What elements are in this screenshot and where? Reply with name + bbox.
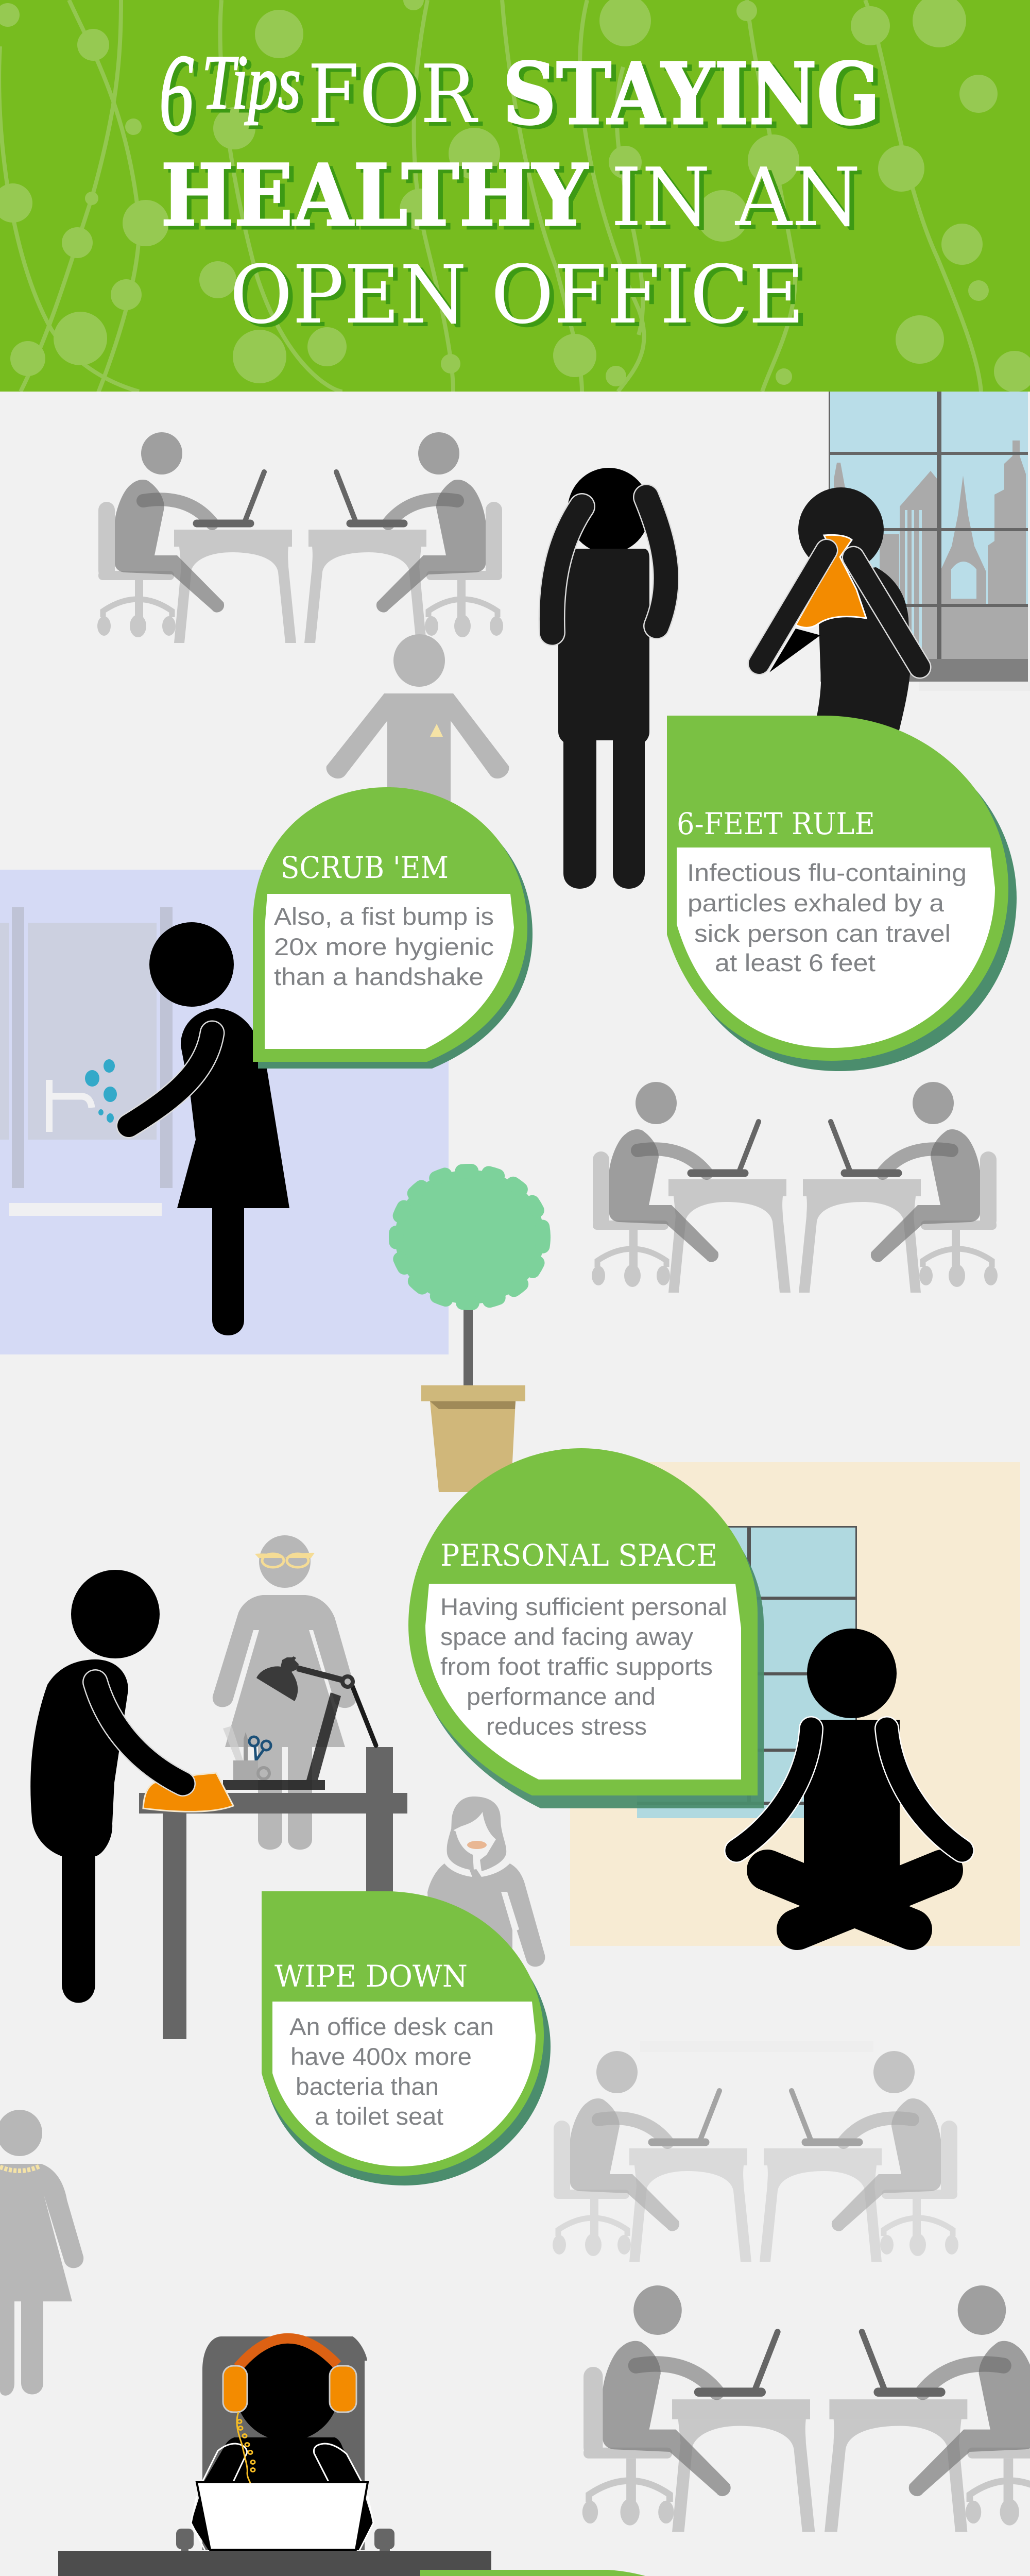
- faint shelf: [640, 2041, 873, 2052]
- callout: wipe down: a toilet seat: [315, 2103, 443, 2130]
- stressed figure holding head: [552, 468, 666, 889]
- callout: scrub em: than a handshake: [274, 963, 484, 990]
- callout: personal space: PERSONAL SPACE: [440, 1538, 717, 1573]
- callout: personal space: Having sufficient personal: [440, 1593, 727, 1620]
- figure washing hands: [129, 922, 289, 1335]
- dark desk: [58, 2551, 491, 2576]
- title: IN AN: [611, 150, 861, 244]
- desk pair 1: [97, 432, 503, 643]
- callout: personal space: from foot traffic supports: [440, 1653, 713, 1680]
- callout: scrub em: Also, a fist bump is: [274, 903, 494, 930]
- callout: scrub em: SCRUB 'EM: [281, 850, 449, 885]
- callout: 6-feet rule: sick person can travel: [694, 920, 951, 947]
- office window with skyline: [820, 392, 1030, 691]
- callout: 6-feet rule: at least 6 feet: [715, 949, 876, 976]
- sick figure with tissue: [759, 487, 920, 737]
- grey woman with glasses: [213, 1535, 357, 1850]
- callout: wipe down: An office desk can: [289, 2013, 494, 2040]
- callout: tune in: [420, 2570, 805, 2576]
- callout: wipe down: bacteria than: [296, 2073, 439, 2100]
- title: FOR: [307, 47, 478, 141]
- title: 6: [159, 31, 194, 155]
- callout: personal space: performance and: [467, 1683, 656, 1710]
- grey woman with necklace: [0, 2110, 83, 2396]
- callout: 6-feet rule: 6-FEET RULE: [677, 806, 875, 841]
- faint desk pair 3: [553, 2051, 958, 2262]
- grey woman with long hair: [427, 1797, 545, 1968]
- callout: personal space: reduces stress: [486, 1713, 647, 1740]
- callout: wipe down: [262, 1891, 551, 2185]
- callout: 6-feet rule: [667, 716, 1017, 1071]
- title: STAYING: [503, 44, 880, 144]
- callout: scrub em: 20x more hygienic: [274, 933, 494, 960]
- callout: 6-feet rule: Infectious flu-containing: [687, 859, 967, 886]
- callout: wipe down: WIPE DOWN: [274, 1959, 468, 1994]
- callout: 6-feet rule: particles exhaled by a: [688, 889, 945, 917]
- header banner: [0, 0, 1030, 392]
- panel: sink area: [0, 870, 449, 1354]
- desk pair 2: [592, 1082, 998, 1293]
- callout: personal space: space and facing away: [440, 1623, 694, 1650]
- callout: wipe down: have 400x more: [290, 2043, 472, 2070]
- grey standing man: [327, 634, 509, 835]
- callout: scrub em: [253, 787, 533, 1069]
- panel: peach room with window: [570, 1462, 1020, 1946]
- meditating figure: [736, 1629, 962, 1929]
- title: [159, 31, 880, 342]
- figure at laptop with headphones: [176, 2336, 394, 2551]
- title: HEALTHY: [161, 145, 589, 245]
- callout: personal space: [408, 1448, 764, 1808]
- desk with lamp and supplies: [139, 1656, 407, 2039]
- figure wiping desk: [30, 1570, 233, 2003]
- potted plant: [395, 1170, 544, 1492]
- title: Tips: [202, 40, 301, 125]
- desk pair 4: [582, 2285, 1030, 2532]
- title: OPEN OFFICE: [230, 248, 804, 342]
